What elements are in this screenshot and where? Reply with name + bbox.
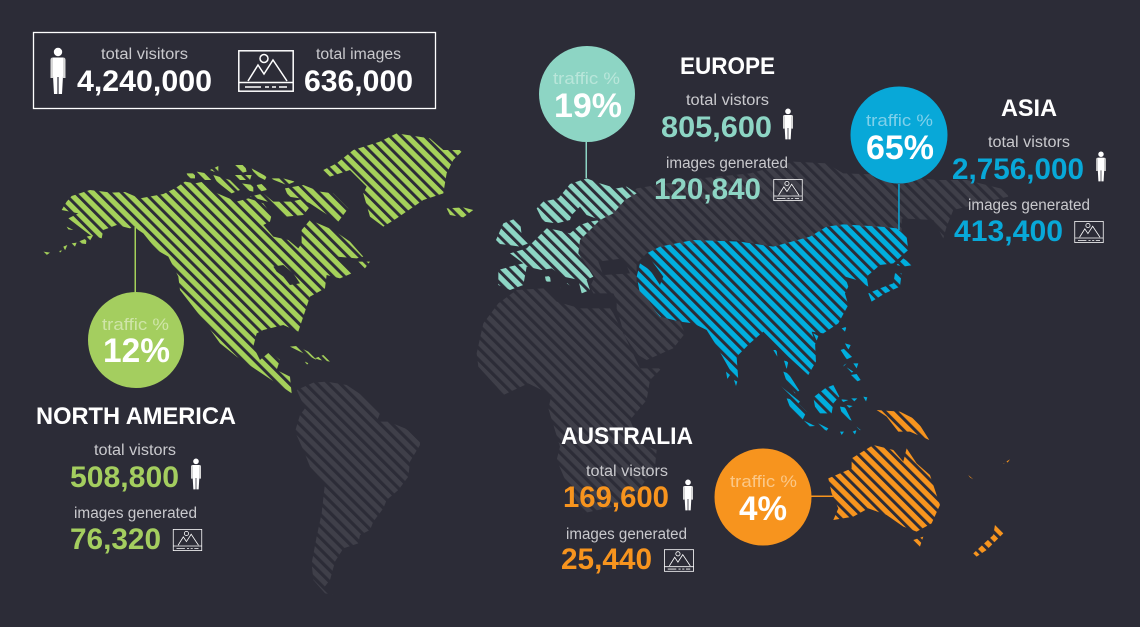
traffic label: traffic % (553, 69, 620, 88)
total visitors label: total visitors (101, 46, 188, 63)
panel: Asia (850, 86, 1106, 248)
icon: person (683, 480, 693, 510)
visitors number: 2,756,000 (952, 153, 1084, 186)
images number: 25,440 (561, 543, 652, 576)
summary box (34, 32, 436, 108)
map: Australia (828, 410, 1010, 557)
traffic label: traffic % (730, 472, 797, 491)
visitors number: 169,600 (563, 481, 669, 514)
icon: person (50, 48, 66, 94)
images number: 120,840 (654, 173, 761, 206)
visitors label: total vistors (988, 134, 1070, 151)
total images number: 636,000 (304, 65, 413, 98)
heading: ASIA (1001, 95, 1057, 122)
panel: Australia (561, 423, 833, 576)
heading: EUROPE (680, 53, 775, 80)
panel: Europe (539, 46, 802, 206)
icon: person (1096, 152, 1106, 181)
map: grey continents (296, 162, 1008, 594)
images label: images generated (566, 526, 687, 543)
traffic bubble (88, 292, 184, 388)
images label: images generated (666, 155, 788, 172)
total visitors number: 4,240,000 (77, 65, 212, 98)
icon: image (239, 51, 293, 91)
traffic bubble (539, 46, 635, 142)
icon: image (1075, 221, 1103, 243)
traffic value: 19% (554, 87, 622, 125)
icon: image (664, 550, 694, 571)
panel: North America (36, 227, 236, 556)
traffic label: traffic % (866, 111, 933, 130)
images label: images generated (968, 197, 1090, 214)
traffic bubble (714, 448, 812, 546)
visitors label: total vistors (686, 92, 769, 109)
visitors label: total vistors (94, 442, 176, 459)
icon: image (774, 179, 802, 201)
map: Europe (496, 178, 636, 294)
traffic label: traffic % (102, 315, 169, 334)
traffic value: 4% (739, 490, 787, 528)
map: Asia (636, 224, 912, 435)
total images label: total images (316, 46, 401, 63)
traffic value: 65% (866, 129, 934, 167)
images number: 413,400 (954, 215, 1063, 248)
connector line (811, 496, 833, 497)
visitors label: total vistors (586, 463, 668, 480)
icon: person (783, 109, 793, 139)
map: North America (40, 130, 480, 395)
traffic value: 12% (103, 332, 170, 370)
icon: image (173, 529, 202, 551)
images label: images generated (74, 505, 197, 522)
images number: 76,320 (70, 523, 161, 556)
connector line (898, 184, 900, 230)
traffic bubble (850, 86, 948, 184)
visitors number: 508,800 (70, 461, 179, 494)
connector line (134, 227, 136, 293)
icon: person (191, 459, 201, 489)
heading: AUSTRALIA (561, 423, 693, 450)
connector line (586, 142, 587, 178)
heading: NORTH AMERICA (36, 403, 236, 430)
visitors number: 805,600 (661, 111, 772, 144)
